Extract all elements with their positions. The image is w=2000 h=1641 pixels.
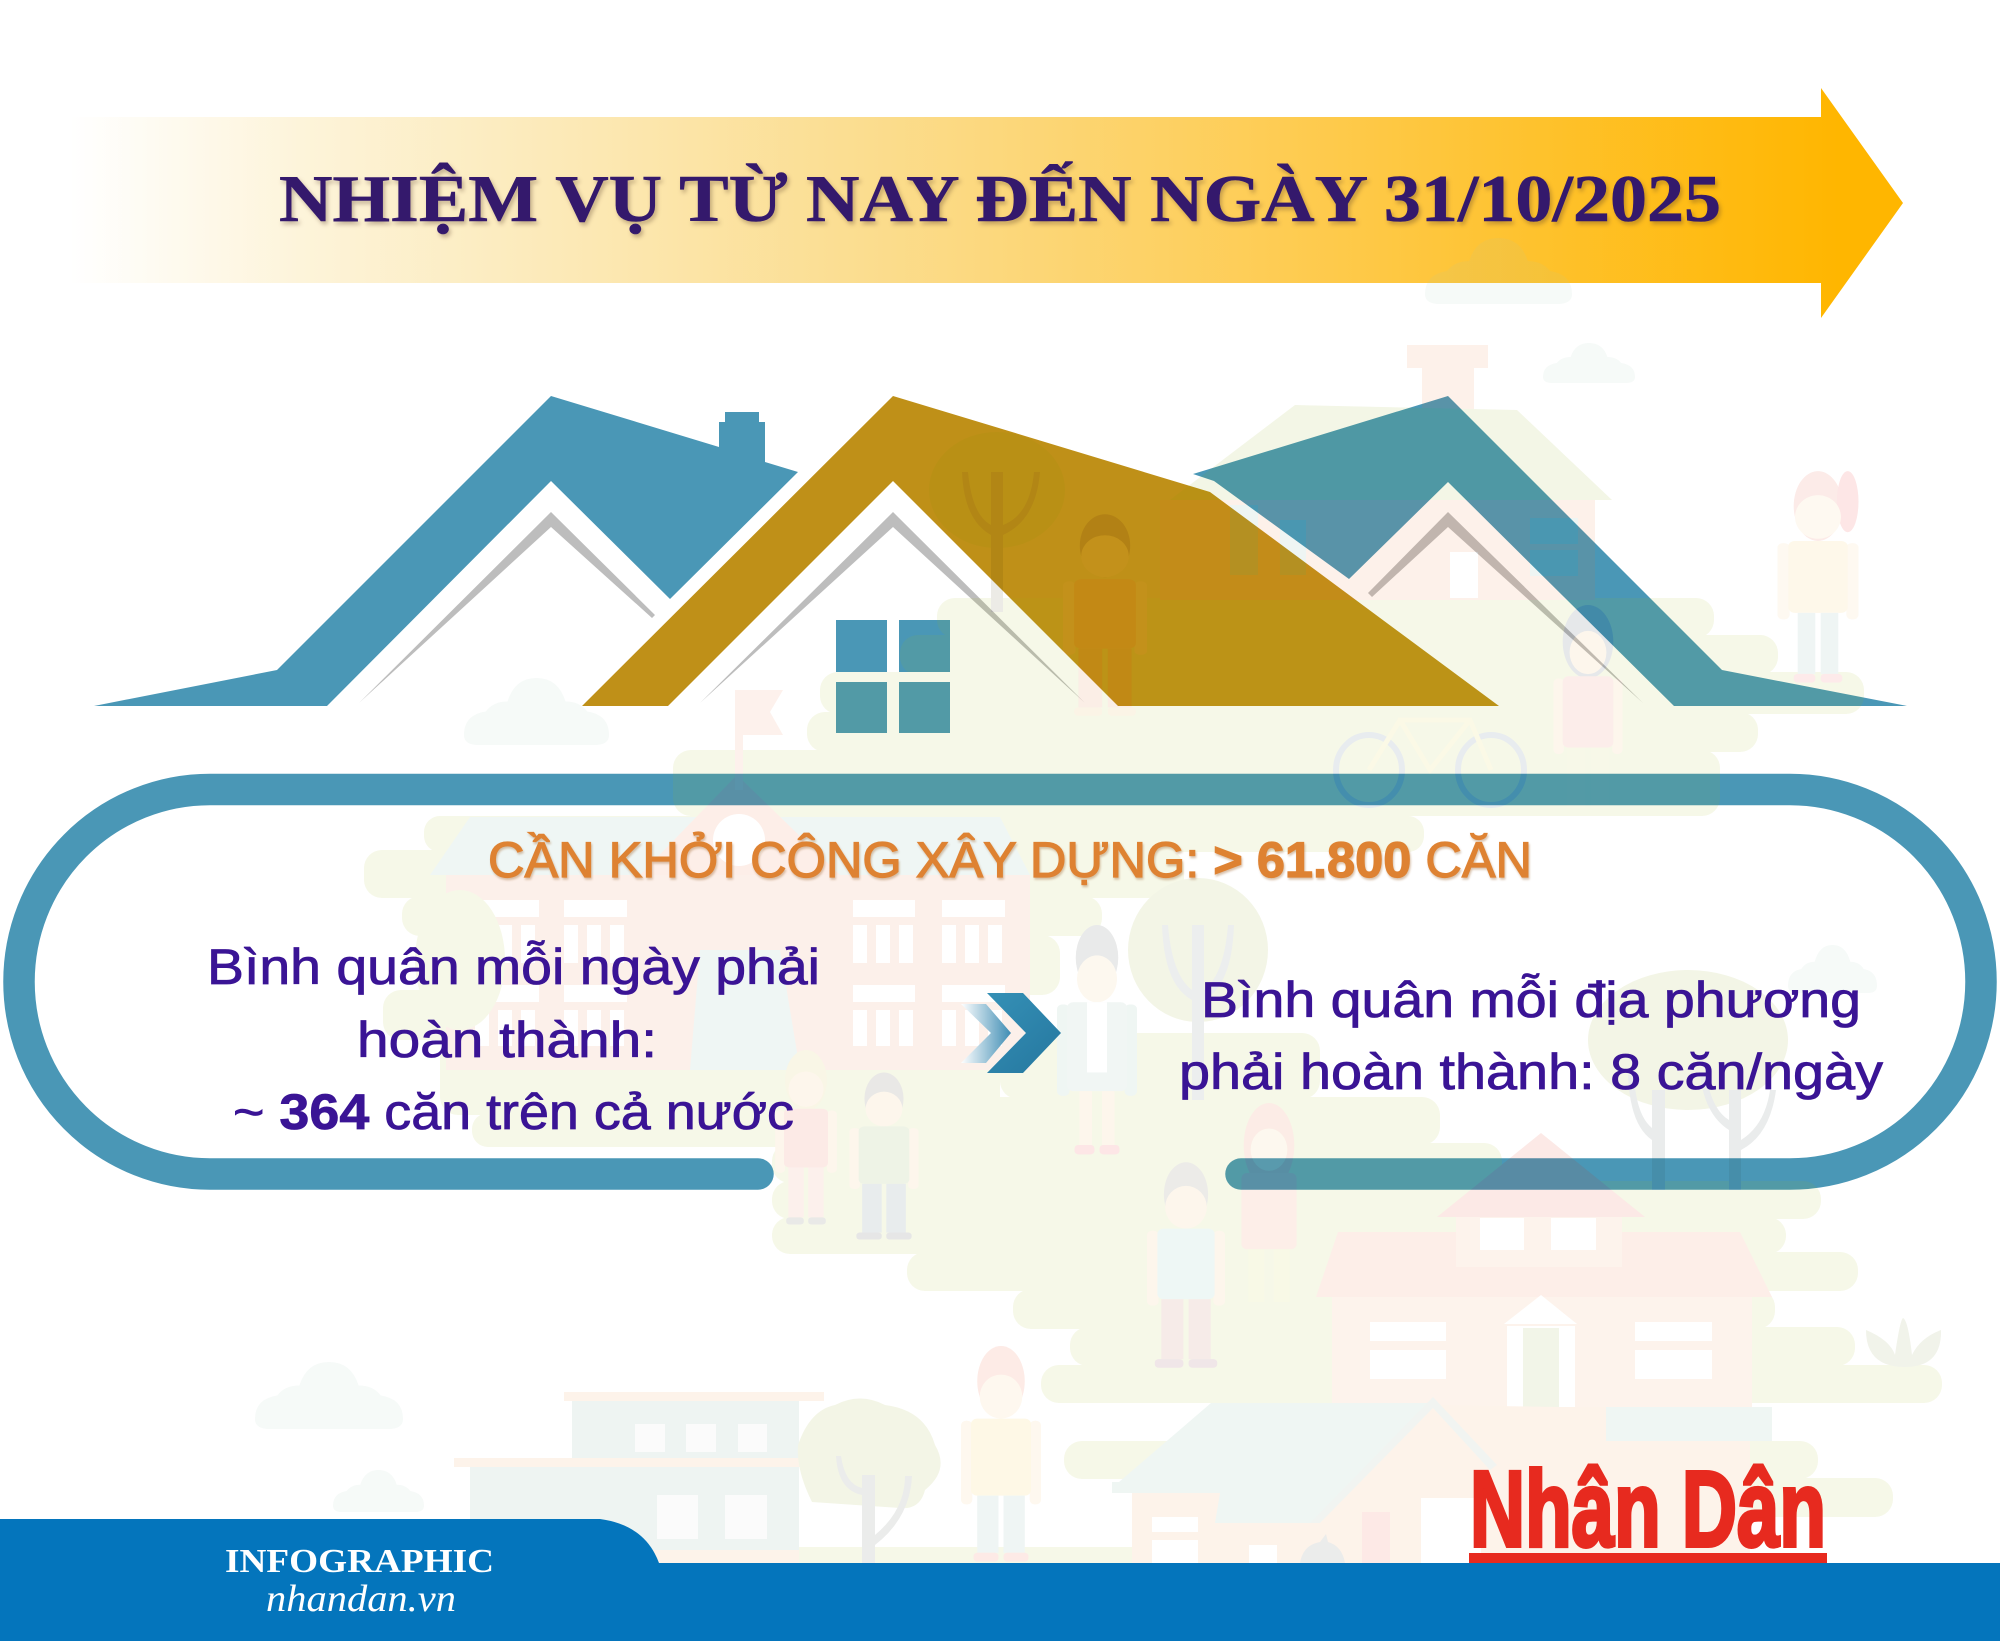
windows [635, 1424, 767, 1539]
school side roofs [430, 817, 1030, 875]
upper block [572, 1401, 799, 1458]
right wing roof [1606, 1407, 1772, 1441]
cornices and base [454, 1392, 824, 1563]
lower block [470, 1467, 799, 1550]
right roof grey inner shadow [1368, 512, 1643, 703]
left roof grey inner shadow [359, 512, 655, 703]
shrub left of school [415, 890, 505, 1030]
background school building [430, 690, 1030, 1070]
windows [1152, 1498, 1481, 1563]
school central roof [640, 775, 840, 875]
school windows [475, 900, 1005, 1046]
background green hedge bands [364, 598, 1942, 1563]
tree behind gold roof [929, 432, 1065, 612]
background trees [415, 432, 1788, 1563]
boy centre [1147, 1162, 1225, 1368]
tree bottom centre [798, 1398, 941, 1563]
girl near bicycle [1554, 605, 1622, 808]
teacher woman [1057, 925, 1137, 1154]
footer label: INFOGRAPHIC [225, 1543, 494, 1580]
flag [735, 690, 783, 790]
body [1332, 1297, 1752, 1407]
main roof [1316, 1232, 1772, 1297]
woman bottom [961, 1346, 1041, 1562]
logo underline bar [1469, 1553, 1827, 1563]
roof [1170, 405, 1612, 500]
background bicycle [1336, 720, 1524, 805]
left text block [207, 939, 820, 1140]
school body [446, 875, 1030, 1070]
header arrow banner [60, 88, 1903, 318]
right text block: phải hoàn thành: 8 căn/ngày [1179, 1044, 1883, 1100]
left text block: hoàn thành: [357, 1012, 657, 1068]
chevron arrow [961, 993, 1061, 1073]
left blue roof with chimney [94, 396, 798, 706]
teal roof [1112, 1403, 1431, 1523]
gable edge [1310, 1397, 1497, 1523]
tree centre right of arrow [1128, 878, 1268, 1100]
house roofs illustration [94, 396, 1907, 733]
footer label: nhandan.vn [266, 1578, 456, 1620]
rounded panel outline [19, 790, 1981, 1174]
logo: Nhân Dân [1469, 1448, 1827, 1569]
footer bar with tab [0, 1519, 2000, 1641]
girl centre [1241, 1103, 1297, 1302]
footer label [225, 1543, 494, 1620]
left text block: Bình quân mỗi ngày phải [207, 939, 820, 995]
upper box [1456, 1217, 1622, 1267]
right blue roof [1193, 396, 1907, 706]
small chevron [961, 1004, 1011, 1063]
logo wordmark: Nhân Dân [1470, 1448, 1826, 1569]
background plant [1866, 1318, 1941, 1367]
body [1160, 500, 1595, 600]
clock [713, 814, 765, 866]
cat silhouette [1300, 1534, 1345, 1563]
boy behind gold roof [1063, 514, 1147, 716]
background bottom-left building [454, 1392, 824, 1563]
panel heading: CẦN KHỞI CÔNG XÂY DỰNG: > 61.800 CĂN [488, 831, 1532, 888]
background big red house [1316, 1133, 1772, 1407]
woman left pair [775, 1050, 837, 1224]
red door [1362, 1512, 1390, 1563]
background clouds [255, 238, 1877, 1512]
man left pair [850, 1072, 918, 1240]
title: NHIỆM VỤ TỪ NAY ĐẾN NGÀY 31/10/2025 [279, 160, 1721, 236]
girl top right [1778, 471, 1858, 683]
centre gold roof [582, 396, 1499, 706]
school door [690, 950, 800, 1070]
chimney [1407, 345, 1488, 450]
peach body [1132, 1405, 1750, 1563]
background top-right house [1160, 345, 1612, 600]
centre roof grey inner shadow [700, 512, 1085, 703]
gable [1437, 1133, 1645, 1217]
faded background illustration [255, 238, 1942, 1563]
background people [775, 471, 1859, 1562]
left text block: ~ 364 căn trên cả nước [233, 1084, 794, 1140]
right text block [1179, 972, 1883, 1100]
twin trees right [1588, 970, 1788, 1190]
windows [1230, 505, 1578, 576]
house window [836, 620, 950, 733]
background bottom teal-roof house [1112, 1397, 1772, 1563]
windows and door [1370, 1218, 1712, 1407]
big chevron [987, 993, 1061, 1073]
right text block: Bình quân mỗi địa phương [1201, 972, 1861, 1028]
